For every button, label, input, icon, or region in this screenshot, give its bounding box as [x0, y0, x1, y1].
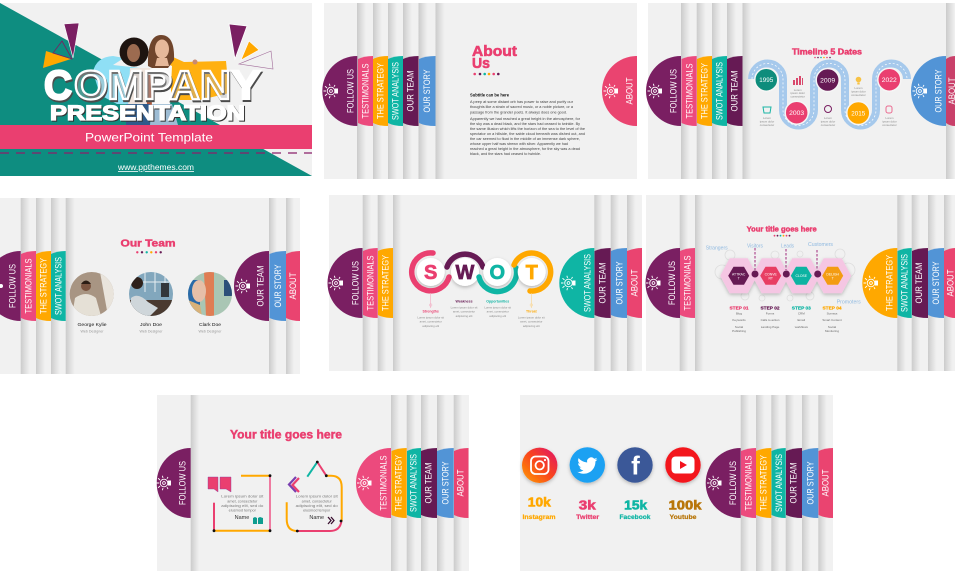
heading: about us [472, 43, 517, 72]
connector dots [752, 270, 821, 278]
tab: follow us: FOLLOW US [178, 461, 189, 505]
strengths caption [417, 293, 444, 328]
tab: the strategy: THE STRATEGY [699, 62, 710, 119]
tab: testimonials [741, 448, 756, 518]
milestone: badge icon and caption: Lorem [886, 116, 894, 120]
team member: clark doe: Web Designer [198, 330, 222, 334]
quote text: adipiscing elit, sed do [296, 504, 338, 508]
stage labels: Visitors [747, 243, 763, 249]
threat caption: amet, consectetur [520, 320, 542, 324]
tab: the strategy: THE STRATEGY [375, 62, 386, 119]
tab: swot analysis [559, 248, 594, 318]
name: Name [309, 515, 324, 521]
tab: our team [912, 248, 928, 318]
hexagon: convert [760, 267, 781, 285]
body text: thoughts like a strain of sacred music, or a noble picture, or a [470, 105, 573, 109]
date: 2015 [847, 102, 870, 124]
tab: swot analysis: SWOT ANALYSIS [409, 454, 420, 512]
winding road [752, 64, 907, 126]
name: Name [235, 515, 249, 521]
tab: our team: OUR TEAM [914, 262, 925, 304]
hexagon: delight [822, 267, 843, 285]
strengths caption: amet, consectetur [420, 320, 442, 324]
tab: follow us [706, 448, 741, 518]
step 01 list: Keywords [732, 318, 746, 322]
stat: instagram [522, 495, 556, 521]
dots [136, 251, 162, 254]
hexagon: close: CLOSE [796, 274, 808, 278]
team member: john doe: John Doe [140, 322, 162, 328]
milestone: chart icon and caption: Lorem [794, 88, 802, 92]
icon: quote marks [208, 477, 231, 492]
body text: the same illusion which lifts the horizon of the sea to the level of the [470, 127, 585, 131]
team member: john doe: Web Designer [140, 330, 163, 334]
heading: about us: About [472, 43, 517, 60]
milestone: bulb icon and caption [851, 77, 866, 97]
tab: swot analysis: SWOT ANALYSIS [390, 62, 401, 120]
hexagon: delight: T [832, 276, 834, 280]
tab: swot analysis [388, 56, 403, 126]
dots [814, 57, 831, 58]
quote text: amet, consectetur [302, 500, 333, 504]
photo: john doe [129, 272, 173, 316]
tab: follow us [328, 248, 362, 318]
tab: about [818, 448, 833, 518]
stat: youtube: Youtube [670, 515, 697, 521]
quote text: eiusmod tempor [229, 508, 257, 512]
decorative triangles left [43, 23, 79, 68]
tab: our story [437, 448, 454, 518]
tab: our story [911, 56, 946, 126]
milestone: badge icon and caption: ipsum dolor [882, 120, 897, 124]
threat caption: adipiscing elit [523, 324, 540, 328]
tab: our story: OUR STORY [614, 261, 625, 304]
body text: the sky was a dead black, and the stars had ceased to twinkle. By [470, 122, 580, 126]
icon: dark chevrons [328, 517, 334, 524]
hexagon: convert: CONVE [765, 272, 777, 276]
tab: our story [928, 248, 944, 318]
dots [774, 235, 790, 237]
hexagon: attract [728, 267, 749, 285]
pink subtitle band: PowerPoint Template [85, 130, 213, 144]
date: 2009: 2009 [820, 77, 836, 84]
tab: the strategy [862, 248, 897, 318]
tab: the strategy [756, 448, 771, 518]
strengths caption: Strengths [423, 310, 439, 314]
fold strips [191, 395, 462, 571]
date: 2022: 2022 [882, 77, 897, 84]
stat: youtube [668, 497, 702, 521]
swot letter w: W [456, 262, 475, 284]
stat: youtube: 100k [668, 497, 702, 512]
step 03 list: workflows [795, 325, 808, 329]
tab: follow us [322, 56, 357, 126]
date: 2003 [785, 101, 808, 124]
milestone: basket icon and caption: consectetur [760, 123, 774, 127]
milestone: head icon and caption: consectetur [821, 123, 835, 127]
title: presentation: PRESENTATION [50, 102, 245, 125]
milestone: basket icon and caption [760, 107, 774, 127]
tab: swot analysis [51, 251, 66, 321]
slide 2: about us [322, 3, 637, 179]
opportunities caption: amet, consectetur [487, 310, 509, 314]
body text: passage from the grander poets. It always does one good. [470, 110, 567, 114]
body text: reached a great height in the atmosphere, for the sky was a dead [470, 147, 580, 151]
tab: our story: OUR STORY [422, 69, 433, 112]
date: 2015: 2015 [851, 110, 866, 117]
quote text [296, 494, 339, 512]
tab: follow us: FOLLOW US [350, 261, 361, 305]
swot letter w [447, 254, 483, 286]
tab: our team: OUR TEAM [789, 462, 800, 504]
tab: swot analysis: SWOT ANALYSIS [774, 454, 785, 512]
quote text: adipiscing elit, sed do [221, 504, 263, 508]
tab: swot analysis [407, 448, 421, 518]
stat: instagram: 10k [528, 495, 552, 510]
slide 4: our team [0, 198, 300, 374]
tab: our story [802, 448, 818, 518]
slide 5: swot [328, 195, 642, 371]
milestone: bulb icon and caption: Lorem [855, 86, 863, 90]
tab: the strategy: THE STRATEGY [38, 257, 49, 314]
tab: about [946, 56, 955, 126]
connector dashes [755, 248, 817, 270]
tab: our story: OUR STORY [931, 261, 942, 304]
title: company: Y [231, 62, 261, 108]
quote text [221, 494, 264, 512]
tab: swot analysis: SWOT ANALYSIS [714, 62, 725, 120]
step 04 list: STEP 04 [822, 305, 842, 310]
step 03 list: STEP 03 [792, 305, 811, 310]
icon: chevrons [289, 477, 299, 492]
tab: our story [611, 248, 627, 318]
step 01 list: Publishing [732, 329, 746, 333]
quote card right [287, 461, 342, 532]
quote text: Lorem ipsum dolor sit [296, 494, 339, 498]
tab: our team [786, 448, 802, 518]
icon: teal quote [253, 517, 263, 524]
threat caption: Threat [526, 310, 537, 314]
opportunities caption: adipiscing elit [489, 314, 506, 318]
stage labels: Promoters [837, 299, 861, 305]
step 03 list: Email [798, 318, 805, 322]
stage labels: Strangers [706, 245, 728, 251]
tab: our team: OUR TEAM [405, 70, 416, 112]
heading: Your title goes here [230, 427, 342, 441]
team member: john doe [140, 322, 163, 334]
swot letter o [479, 258, 517, 292]
icon: youtube [665, 447, 701, 483]
step 04 list: Surveys [827, 312, 838, 316]
stage labels: Customers [808, 242, 833, 248]
slide 8: follow us [520, 395, 833, 571]
stage labels: Leads [781, 243, 794, 249]
stat: facebook: 15k [624, 497, 648, 512]
hexagon: attract: T [738, 276, 740, 280]
weakness caption: Weakness [455, 300, 473, 304]
body text: A peep at some distant orb has power to raise and purify our [470, 100, 574, 104]
date: 2003: 2003 [789, 110, 805, 117]
tab: swot analysis: SWOT ANALYSIS [53, 257, 64, 315]
title: company [44, 62, 261, 108]
fold strips [681, 3, 955, 179]
tab: follow us [156, 448, 191, 518]
step 02 list: Forms [766, 312, 775, 316]
tab: about [627, 248, 642, 318]
title: company: OMPAN [74, 62, 231, 108]
tab: swot analysis [898, 248, 912, 318]
heading: about us: Us [472, 55, 490, 72]
title: company: C [44, 62, 72, 108]
tab: about [454, 448, 468, 518]
tab: about: ABOUT [820, 469, 831, 496]
tab: testimonials: TESTIMONIALS [379, 456, 390, 510]
tab: testimonials [680, 248, 695, 318]
tab: our story: OUR STORY [273, 264, 284, 308]
team member: george kylie: Web Designer [80, 330, 104, 334]
milestone: bulb icon and caption: consectetur [851, 93, 866, 97]
date: 1995 [755, 68, 778, 91]
step 04 list [822, 305, 842, 333]
photo: two women with speech bubbles [93, 35, 229, 125]
hexagon: convert: RT [768, 276, 773, 280]
stat: twitter: Twitter [576, 515, 600, 521]
tab: the strategy [378, 248, 393, 318]
tab: our team [234, 251, 269, 321]
tab: testimonials [356, 448, 391, 518]
tab: follow us: FOLLOW US [728, 461, 739, 505]
milestone: chart icon and caption: consectetur [790, 94, 805, 98]
pink subtitle band [0, 125, 312, 149]
body text: spectator on a hillside, the sable cloud beneath was dished out, and [470, 132, 585, 136]
milestone: basket icon and caption: Lorem [763, 116, 772, 120]
subtitle: Subtitle can be here [470, 92, 510, 98]
milestone: head icon and caption: ipsum dolor [821, 120, 835, 124]
strengths caption: adipiscing elit [422, 324, 439, 328]
tab: follow us: FOLLOW US [7, 264, 18, 308]
tab: testimonials: TESTIMONIALS [744, 456, 755, 510]
fold strips [21, 198, 294, 374]
swot letter t [514, 253, 551, 291]
tab: follow us: FOLLOW US [345, 69, 356, 113]
threat caption: Lorem ipsum dolor sit [518, 316, 545, 320]
step 04 list: Smart Content [822, 318, 842, 322]
tab: about [944, 248, 955, 318]
milestone: chart icon and caption: ipsum dolor [790, 91, 805, 95]
icon: facebook: f [631, 450, 640, 480]
tab: swot analysis: SWOT ANALYSIS [583, 254, 594, 312]
team member: clark doe: Clark Doe [199, 322, 221, 328]
opportunities caption [484, 300, 511, 318]
milestone: head icon and caption [821, 106, 835, 127]
step 04 list: Monitoring [825, 329, 839, 333]
tab: about [286, 251, 300, 321]
tab: follow us: FOLLOW US [667, 261, 678, 305]
quote text: amet, consectetur [227, 500, 258, 504]
threat caption [518, 293, 545, 328]
tab: our team: OUR TEAM [424, 462, 435, 504]
tab: testimonials: TESTIMONIALS [684, 64, 695, 118]
milestone: bulb icon and caption: ipsum dolor [851, 90, 866, 94]
milestone: chart icon and caption [790, 76, 805, 98]
slide 6: funnel steps [646, 195, 955, 371]
tab: testimonials [358, 56, 373, 126]
tab: our team [594, 248, 611, 318]
doodle background [715, 249, 855, 301]
tab: testimonials: TESTIMONIALS [683, 256, 694, 310]
stat: facebook [620, 497, 651, 521]
fold strips [357, 3, 444, 179]
slide 7: testimonials [156, 395, 469, 571]
body text: whose upper half was strewn with silver. Apparently we had [470, 142, 568, 146]
icon: instagram [522, 448, 557, 483]
step 03 list: CRM [798, 312, 805, 316]
tab: testimonials: TESTIMONIALS [360, 64, 371, 118]
tab: our story [270, 251, 286, 321]
tab: our team [421, 448, 437, 518]
team member: george kylie [78, 322, 107, 334]
slide 3: timeline [646, 3, 955, 179]
tab: follow us [646, 56, 681, 126]
teal diagonal background [0, 3, 312, 176]
tab: about: ABOUT [455, 469, 466, 496]
tab: the strategy [36, 251, 51, 321]
body text [470, 100, 585, 156]
tab: about: ABOUT [624, 77, 635, 104]
milestone: badge icon and caption [882, 106, 897, 127]
website link: www.ppthemes.com [117, 163, 194, 172]
step 02 list: Landing Page [761, 325, 780, 329]
tab: swot analysis [772, 448, 786, 518]
photo: clark doe [188, 272, 232, 316]
dashed line [0, 152, 312, 154]
stat: twitter [576, 497, 600, 521]
fold strips [741, 395, 827, 571]
milestone: basket icon and caption: ipsum dolor [760, 120, 774, 124]
tab: the strategy [392, 448, 407, 518]
swot letter s: S [424, 262, 437, 284]
heading: our team: Our Team [120, 239, 176, 250]
step 02 list: STEP 02 [760, 305, 780, 310]
tab: our team [403, 56, 418, 126]
stat: twitter: 3k [579, 497, 597, 512]
tab: testimonials [21, 251, 36, 321]
weakness caption: amet, consectetur [453, 310, 475, 314]
heading: timeline: Timeline 5 Dates [792, 48, 863, 56]
stat: facebook: Facebook [620, 515, 651, 521]
tab: our team: OUR TEAM [729, 70, 740, 112]
pale hexagons [720, 258, 851, 293]
step 01 list [730, 305, 749, 333]
tab: the strategy [373, 56, 388, 126]
fold strips [363, 195, 636, 371]
heading: Your title goes here [747, 225, 817, 234]
quote card left [208, 474, 271, 532]
tab: our story: OUR STORY [440, 461, 451, 504]
body text: the car seemed to float in the middle of an immense dark sphere, [470, 137, 580, 141]
stage labels [706, 242, 861, 305]
swot letter o: O [490, 262, 505, 284]
weakness caption [451, 300, 478, 318]
date: 2009 [816, 68, 839, 92]
tab: testimonials: TESTIMONIALS [23, 258, 34, 314]
strengths caption: Lorem ipsum dolor sit [417, 316, 444, 320]
tab: testimonials [363, 248, 378, 318]
team member: clark doe [198, 322, 222, 334]
step 01 list: Social [735, 325, 743, 329]
tab: follow us [646, 248, 680, 318]
tab: testimonials: TESTIMONIALS [365, 256, 376, 310]
milestone: badge icon and caption: consectetur [882, 123, 897, 127]
tab: about [602, 56, 637, 126]
quote text: eiusmod tempor [303, 508, 331, 512]
fold strips [680, 195, 952, 371]
date: 2022 [878, 68, 901, 91]
opportunities caption: Opportunities [486, 300, 509, 304]
tab: the strategy: THE STRATEGY [394, 454, 405, 511]
tab: the strategy: THE STRATEGY [759, 454, 770, 511]
step 04 list: Social [828, 325, 836, 329]
swot letter t: T [526, 262, 538, 284]
icon: twitter [570, 447, 605, 483]
tab: our team [727, 56, 742, 126]
hexagon: attract: ATTRAC [732, 272, 746, 276]
photo: george kylie [69, 272, 115, 316]
hexagon: close [791, 267, 812, 285]
tab: the strategy [697, 56, 712, 126]
team member: george kylie: George Kylie [78, 322, 107, 328]
step 03 list [792, 305, 811, 329]
tab: our team: OUR TEAM [598, 262, 609, 304]
date: 1995: 1995 [759, 77, 774, 84]
stat: instagram: Instagram [522, 515, 556, 521]
body text: Apparently we had reached a great height in the atmosphere, for [470, 117, 581, 121]
dots [473, 73, 500, 75]
tab: about: ABOUT [630, 269, 641, 296]
tab: the strategy: THE STRATEGY [885, 254, 896, 311]
quote text: Lorem ipsum dolor sit [221, 494, 264, 498]
tab: about: ABOUT [288, 272, 299, 300]
hexagon: delight: DELIGH [826, 272, 840, 276]
tab: our team: OUR TEAM [255, 265, 266, 306]
step 01 list: Blog [736, 312, 742, 316]
weakness caption: adipiscing elit [456, 314, 473, 318]
body text: black, and the stars had ceased to twinkle. [470, 152, 541, 156]
tab: swot analysis: SWOT ANALYSIS [899, 254, 910, 312]
decorative triangles right [229, 24, 273, 69]
tab: our story [419, 56, 436, 126]
milestone: head icon and caption: Lorem [824, 116, 833, 120]
tab: the strategy: THE STRATEGY [380, 254, 391, 311]
step 02 list [760, 305, 780, 329]
tab: testimonials [682, 56, 697, 126]
tab: our story: OUR STORY [933, 69, 944, 112]
tab: follow us [0, 251, 21, 321]
swot letter s [412, 253, 449, 291]
icon: facebook [617, 447, 653, 483]
step 02 list: Calls to action [761, 318, 780, 322]
step 01 list: STEP 01 [730, 305, 749, 310]
tab: follow us: FOLLOW US [668, 69, 679, 113]
tab: our story: OUR STORY [805, 461, 816, 504]
tab: swot analysis [712, 56, 727, 126]
slide 1: cover [0, 3, 312, 176]
opportunities caption: Lorem ipsum dolor sit [484, 305, 511, 309]
weakness caption: Lorem ipsum dolor sit [451, 305, 478, 309]
